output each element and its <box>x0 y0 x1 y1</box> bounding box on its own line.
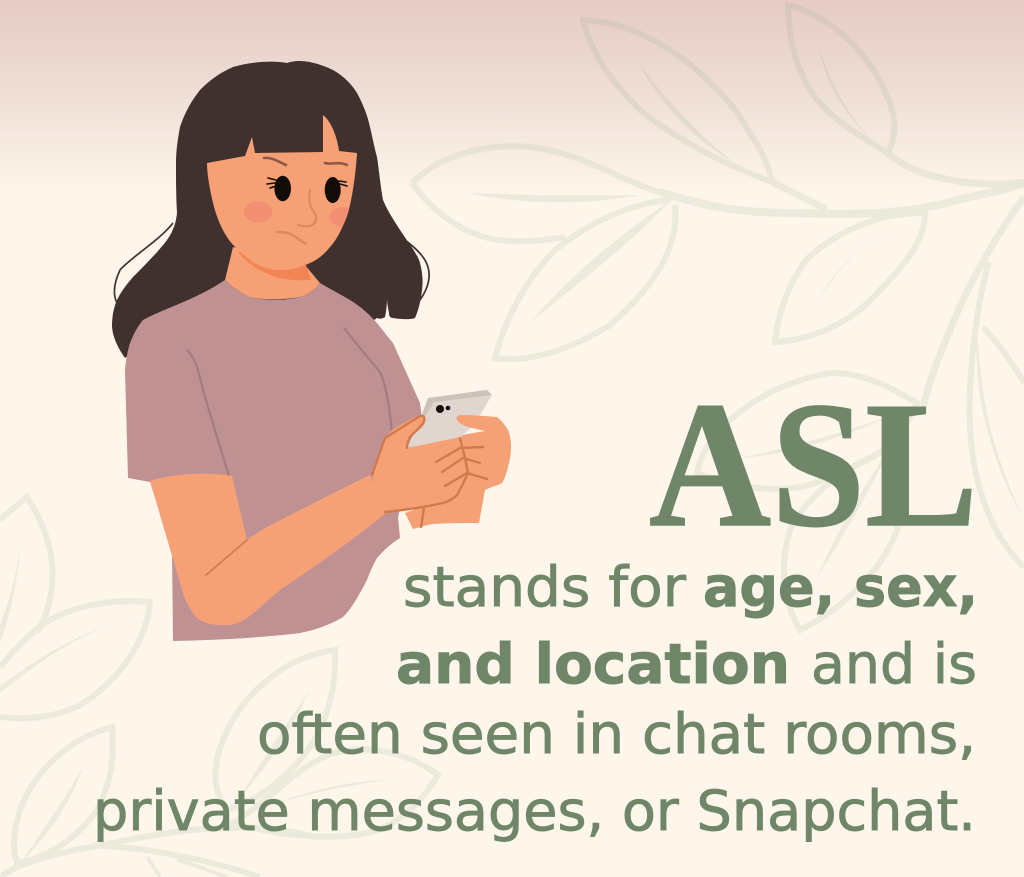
front hand <box>372 415 468 512</box>
body text <box>93 555 978 843</box>
t-shirt <box>125 280 422 641</box>
elbow crease <box>206 540 247 575</box>
neck shadow <box>238 250 311 280</box>
nose <box>298 190 316 226</box>
leaf branch: top right <box>412 5 1024 359</box>
neck <box>225 247 320 299</box>
back hand <box>405 415 511 529</box>
eyes <box>274 176 341 203</box>
shirt fold lines <box>187 328 392 476</box>
line 3: often seen in chat rooms, <box>257 702 976 766</box>
leaves behind title <box>697 373 917 630</box>
line 2 <box>396 632 977 696</box>
cheeks <box>244 202 358 227</box>
line 1 <box>403 555 978 619</box>
line 1: age, sex, <box>703 555 978 619</box>
hand outlines and fingers <box>372 416 487 527</box>
eyebrows <box>264 158 347 165</box>
upper arm and forearm <box>150 474 387 625</box>
hair wisps <box>114 223 429 303</box>
line 4: private messages, or Snapchat. <box>93 779 976 843</box>
phone <box>407 390 492 448</box>
eyelashes <box>267 178 347 188</box>
mouth <box>277 232 306 244</box>
line 1: stands for <box>403 555 686 619</box>
hair <box>112 61 423 358</box>
top gradient band <box>0 0 1024 195</box>
leaf branch: right side <box>922 197 1024 567</box>
leaf branch: bottom left <box>0 497 438 877</box>
face <box>207 115 357 270</box>
line 2: and is <box>811 632 977 696</box>
line 2: and location <box>396 632 790 696</box>
illustration: woman with phone <box>112 61 511 641</box>
title: ASL: ASL <box>649 365 978 564</box>
